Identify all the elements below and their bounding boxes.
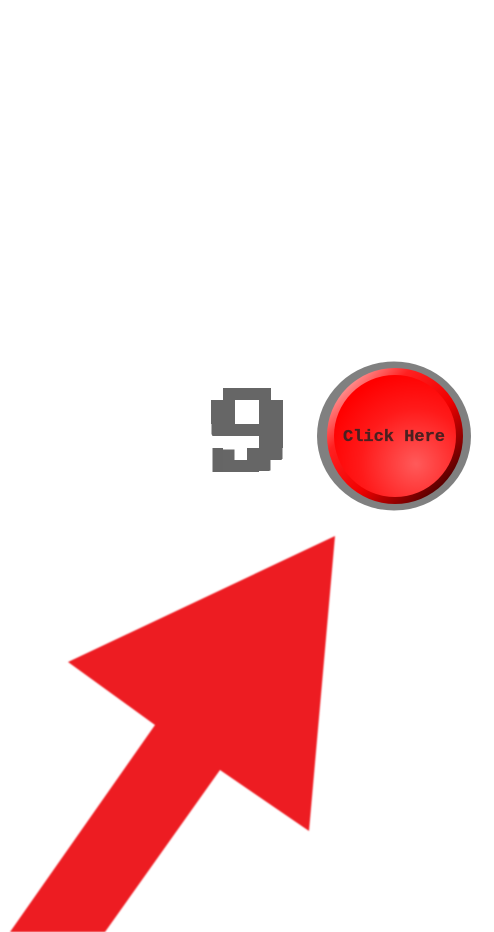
- countdown number: 9: [206, 363, 292, 497]
- button rim: [327, 368, 463, 504]
- arrow pointing at button: [10, 536, 335, 932]
- button label: Click Here: [343, 428, 445, 447]
- button outer ring: [317, 362, 471, 510]
- infographic canvas: [9, 362, 471, 932]
- button face: [334, 375, 456, 497]
- button: [317, 362, 471, 510]
